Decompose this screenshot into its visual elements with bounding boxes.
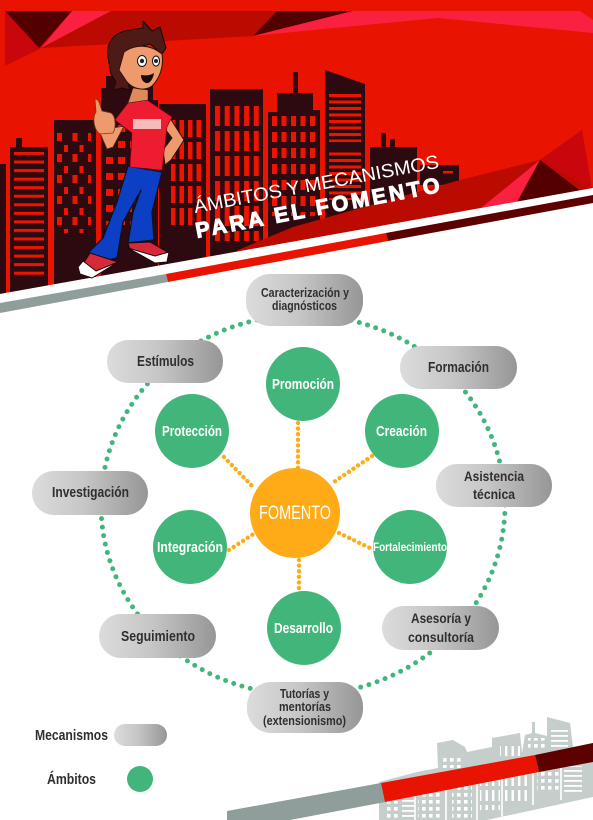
legend: Mecanismos: Mecanismos [35, 728, 108, 744]
mecanismo: Tutorías y mentorías: mentorías [279, 700, 331, 714]
mecanismo: Asistencia técnica: Asistencia [464, 468, 524, 484]
shirt logo [133, 119, 161, 129]
mecanismo: Asesoría y consultoría [382, 606, 499, 650]
mecanismo: Asesoría y consultoría: consultoría [408, 629, 474, 645]
footer diagonal stripe [227, 743, 593, 820]
ámbito: Protección [155, 394, 229, 468]
neck [128, 88, 148, 103]
face [119, 46, 163, 89]
ámbito: Creación [365, 394, 439, 468]
left shoe [78, 253, 118, 278]
jeans [88, 166, 162, 260]
mecanismo: Formación: Formación [428, 360, 489, 376]
building 4 [159, 104, 206, 266]
title [192, 152, 442, 243]
legend [35, 724, 167, 792]
mecanismo: Estímulos: Estímulos [137, 354, 194, 370]
ámbito: Fortalecimiento: Fortalecimiento [373, 542, 447, 554]
building 3 [101, 76, 158, 290]
mecanismo: Caracterización y diagnósticos [246, 274, 363, 326]
ámbito: Creación: Creación [376, 424, 427, 440]
arm left [100, 126, 124, 149]
mecanismo: Investigación: Investigación [52, 485, 129, 501]
building 1 [10, 138, 48, 297]
mecanismo: Tutorías y mentorías: Tutorías y [280, 687, 329, 701]
city skyline [0, 70, 459, 299]
dotted ring of mechanisms [101, 315, 505, 695]
hand thumbs up [94, 99, 115, 134]
title line 1: ÁMBITOS Y MECANISMOS [192, 152, 441, 218]
diagonal stripe under header [0, 188, 593, 313]
mecanismo: Investigación [32, 471, 148, 515]
building 2 [54, 120, 96, 290]
mouth [141, 73, 154, 83]
mecanismo: Estímulos [107, 340, 223, 383]
decorative top polygons [5, 11, 593, 66]
legend: Ámbitos: Ámbitos [47, 771, 96, 788]
right shoe [128, 242, 169, 263]
center circle: FOMENTO: FOMENTO [259, 503, 331, 524]
mecanismo: Seguimiento: Seguimiento [121, 629, 195, 645]
mecanismo: Seguimiento [99, 614, 216, 658]
ámbito: Desarrollo: Desarrollo [274, 621, 333, 637]
mecanismo: Formación [400, 346, 517, 389]
building 6 [268, 72, 320, 240]
ámbito: Promoción: Promoción [272, 377, 334, 393]
ámbito: Integración: Integración [157, 540, 223, 556]
mecanismo: Tutorías y mentorías [247, 682, 363, 733]
arm right [162, 118, 184, 165]
orange dotted connectors [224, 423, 372, 590]
ámbito: Protección: Protección [162, 424, 222, 440]
building 8 [370, 133, 459, 206]
title line 2: PARA EL FOMENTO [193, 173, 442, 243]
character: mascot boy [78, 21, 184, 278]
building 5 [210, 89, 263, 259]
ámbito: Promoción [266, 347, 340, 421]
t-shirt [115, 100, 172, 170]
ámbito: Integración [153, 510, 227, 584]
eyes [138, 56, 160, 66]
mecanismo: Asistencia técnica [436, 464, 552, 507]
ámbito: Desarrollo [267, 591, 341, 665]
hair [107, 21, 166, 90]
ámbito: Fortalecimiento [373, 510, 447, 584]
mecanismo: Asistencia técnica: técnica [473, 486, 515, 502]
panel: red header banner [0, 0, 593, 300]
mecanismo: Caracterización y diagnósticos: Caracterización y [261, 286, 349, 300]
decorative lower right polygons [238, 130, 592, 252]
building 7 [325, 70, 368, 230]
mecanismo: Asesoría y consultoría: Asesoría y [411, 610, 471, 626]
mecanismo: Caracterización y diagnósticos: diagnósticos [272, 299, 337, 313]
footer skyline [379, 717, 593, 820]
center circle: FOMENTO [250, 468, 340, 558]
mecanismo: Tutorías y mentorías: (extensionismo) [263, 714, 346, 728]
